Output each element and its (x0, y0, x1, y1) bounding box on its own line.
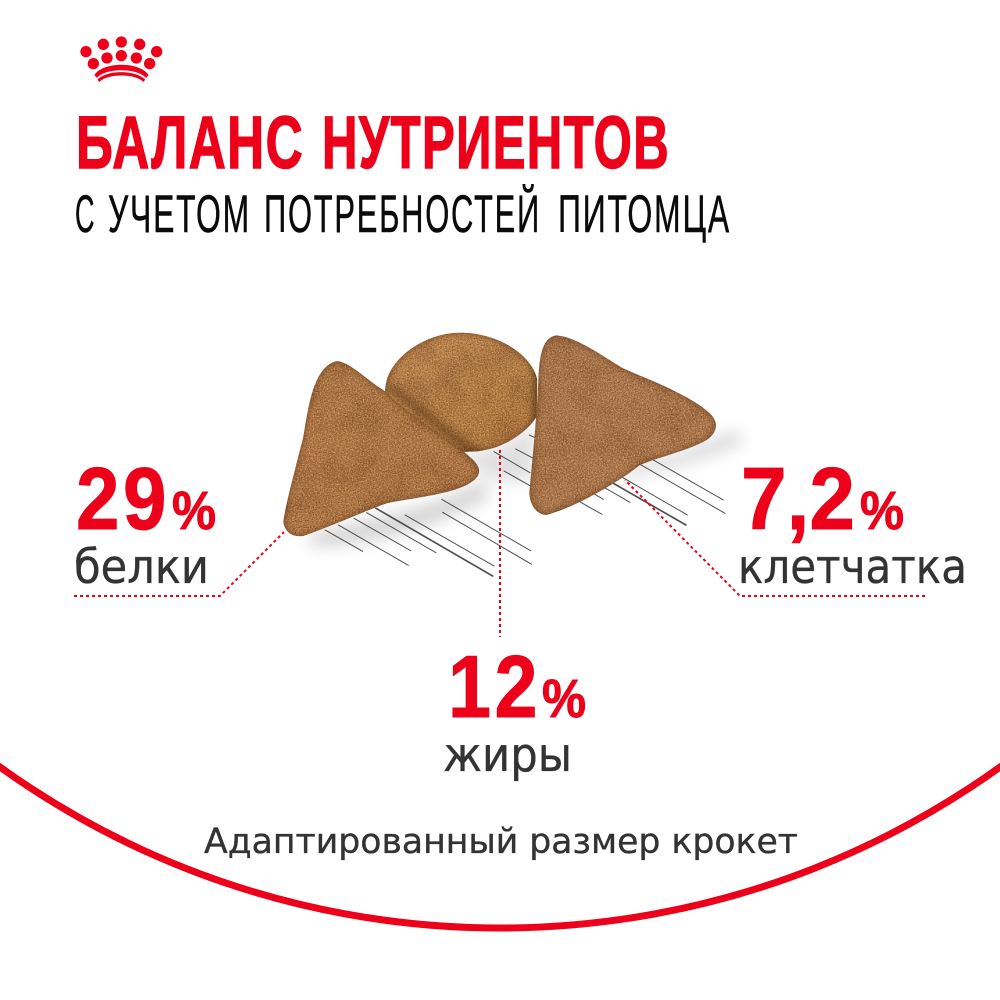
subtitle: УЧЕТОМ (108, 185, 251, 244)
stat: protein (74, 449, 216, 595)
stat: fat: % (542, 669, 586, 729)
stat: fiber: клетчатка (738, 540, 967, 595)
stat: protein: белки (74, 540, 209, 595)
title: НУТРИЕНТОВ (322, 101, 670, 184)
kibble: right triangle (529, 335, 716, 515)
caption: Адаптированный размер крокет (204, 822, 798, 862)
stat: fat (443, 637, 586, 783)
stat: fat: жиры (443, 728, 572, 783)
title (76, 101, 670, 184)
icon: royal crown logo (80, 36, 162, 82)
kibble: left triangle (283, 361, 479, 536)
stat: protein: % (172, 481, 216, 541)
subtitle: С (75, 185, 96, 244)
dotted leader: fiber (625, 480, 925, 596)
stat: fiber: % (860, 481, 904, 541)
stat: fiber: 7,2 (741, 449, 855, 548)
dotted leader: protein (74, 532, 284, 596)
stat: fat: 12 (448, 637, 541, 736)
stat: protein: 29 (76, 449, 170, 548)
subtitle (75, 183, 731, 244)
dotted leader: fat (499, 450, 501, 637)
kibble: round (383, 333, 537, 453)
title: БАЛАНС (76, 101, 304, 184)
kibble illustration (283, 333, 743, 576)
stat: fiber (738, 449, 967, 595)
subtitle: ПИТОМЦА (558, 185, 731, 244)
shadow on round kibble (385, 365, 538, 452)
subtitle: ПОТРЕБНОСТЕЙ (264, 183, 541, 244)
